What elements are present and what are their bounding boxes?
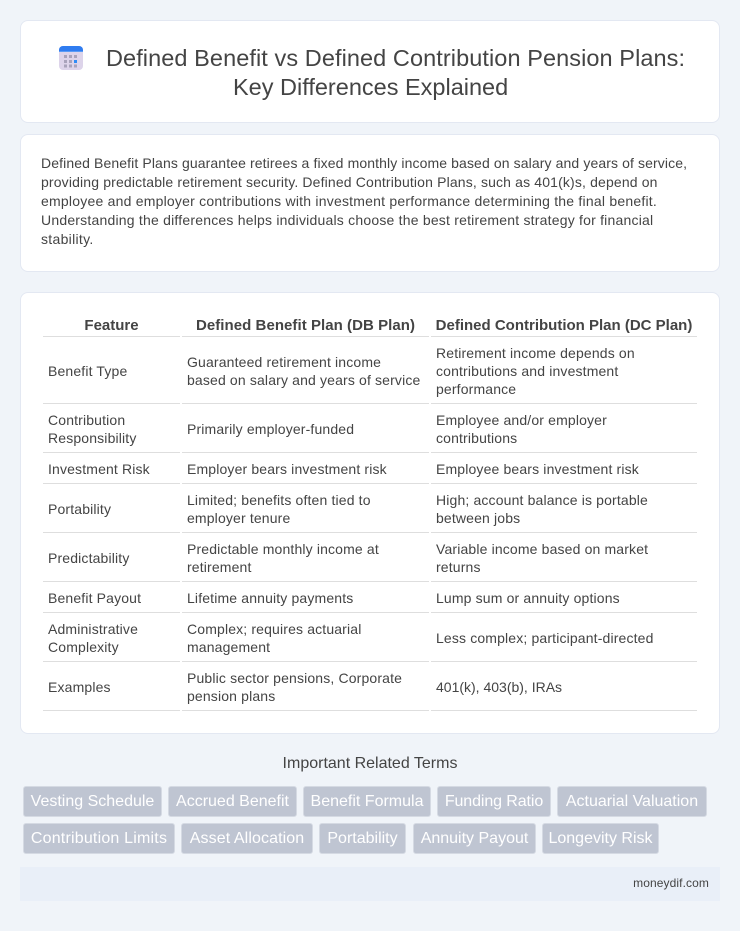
comparison table: pension plans xyxy=(187,688,275,704)
intro paragraph: stability. xyxy=(41,231,94,247)
comparison table: Complex; requires actuarial xyxy=(187,621,361,637)
comparison table: management xyxy=(187,639,270,655)
related terms chips: Accrued Benefit xyxy=(176,793,289,810)
footer bar xyxy=(20,867,720,901)
comparison table: Less complex; participant-directed xyxy=(436,630,654,646)
related terms chips: Actuarial Valuation xyxy=(566,793,698,810)
comparison table: contributions and investment xyxy=(436,363,618,379)
comparison table: Lifetime annuity payments xyxy=(187,590,353,606)
intro paragraph xyxy=(41,155,687,247)
comparison table: performance xyxy=(436,381,516,397)
related terms chips: Asset Allocation xyxy=(190,830,304,847)
table panel xyxy=(20,292,720,734)
comparison table: Defined Benefit Plan (DB Plan) xyxy=(196,317,415,334)
comparison table: Retirement income depends on xyxy=(436,345,635,361)
title: Key Differences Explained xyxy=(233,74,508,100)
comparison table: Administrative xyxy=(48,621,138,637)
comparison table: Benefit Payout xyxy=(48,590,141,606)
intro paragraph: Understanding the differences helps individuals choose the best retirement strategy for financial xyxy=(41,212,653,228)
intro paragraph: Defined Benefit Plans guarantee retirees a fixed monthly income based on salary and years of service, xyxy=(41,155,687,171)
related terms chips: Longevity Risk xyxy=(548,830,653,847)
comparison table: Contribution xyxy=(48,412,125,428)
comparison table: Feature xyxy=(84,317,139,334)
related terms chips: Benefit Formula xyxy=(311,793,423,810)
comparison table: based on salary and years of service xyxy=(187,372,420,388)
comparison table: Predictable monthly income at xyxy=(187,541,379,557)
comparison table: Defined Contribution Plan (DC Plan) xyxy=(436,317,692,334)
comparison table: Employee bears investment risk xyxy=(436,461,639,477)
title: Defined Benefit vs Defined Contribution Pension Plans: xyxy=(106,45,685,71)
comparison table: Limited; benefits often tied to xyxy=(187,492,371,508)
comparison table: Benefit Type xyxy=(48,363,127,379)
comparison table: Guaranteed retirement income xyxy=(187,354,381,370)
comparison table: Examples xyxy=(48,679,111,695)
intro panel xyxy=(20,134,720,272)
intro paragraph: providing predictable retirement security. Defined Contribution Plans, such as 401(k)s, depend on xyxy=(41,174,658,190)
header panel xyxy=(20,20,720,123)
comparison table: Investment Risk xyxy=(48,461,150,477)
intro paragraph: employee and employer contributions with investment performance determining the final benefit. xyxy=(41,193,657,209)
footer source text: moneydif.com xyxy=(633,876,709,890)
related terms chips: Annuity Payout xyxy=(421,830,528,847)
comparison table: Complexity xyxy=(48,639,119,655)
comparison table: contributions xyxy=(436,430,517,446)
comparison table: Employee and/or employer xyxy=(436,412,607,428)
comparison table: Predictability xyxy=(48,550,129,566)
title xyxy=(106,45,685,100)
comparison table xyxy=(43,317,697,711)
comparison table: Public sector pensions, Corporate xyxy=(187,670,402,686)
related terms chips: Portability xyxy=(327,830,398,847)
comparison table: Lump sum or annuity options xyxy=(436,590,620,606)
comparison table: 401(k), 403(b), IRAs xyxy=(436,679,562,695)
comparison table: between jobs xyxy=(436,510,520,526)
icon: calendar grid xyxy=(59,46,83,70)
comparison table: Employer bears investment risk xyxy=(187,461,387,477)
related terms chips: Funding Ratio xyxy=(445,793,543,810)
related terms chips: Contribution Limits xyxy=(31,830,167,847)
comparison table: Responsibility xyxy=(48,430,136,446)
comparison table: High; account balance is portable xyxy=(436,492,648,508)
related terms chips: Vesting Schedule xyxy=(31,793,154,810)
related terms heading: Important Related Terms xyxy=(283,755,457,772)
comparison table: retirement xyxy=(187,559,252,575)
comparison table: Variable income based on market xyxy=(436,541,648,557)
related terms chips xyxy=(23,786,707,854)
comparison table: Portability xyxy=(48,501,111,517)
comparison table: employer tenure xyxy=(187,510,290,526)
comparison table: Primarily employer-funded xyxy=(187,421,354,437)
comparison table: returns xyxy=(436,559,481,575)
